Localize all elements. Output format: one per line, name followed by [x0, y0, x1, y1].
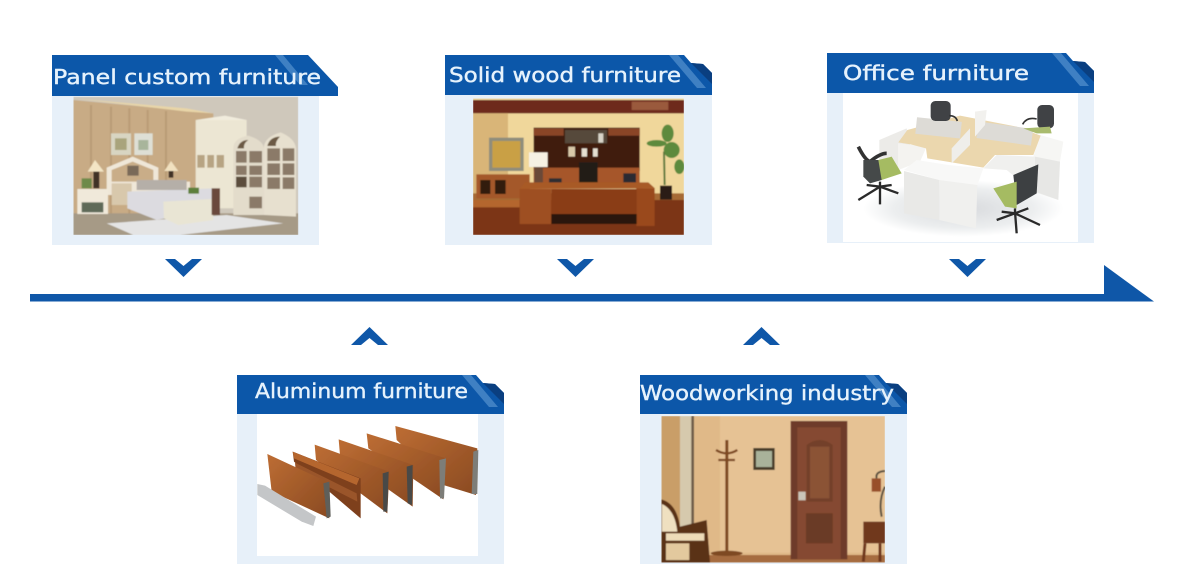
panel: Panel custom furniture [52, 55, 338, 245]
banner corner fold [886, 383, 907, 404]
panel: Office furniture [827, 53, 1094, 243]
photo: office workstation [858, 101, 1063, 237]
heading: Aluminum furniture [255, 379, 468, 403]
banner shine [865, 375, 901, 407]
card background [237, 414, 504, 564]
timeline arrow [30, 265, 1154, 302]
heading: Office furniture [843, 61, 1029, 85]
white image area [257, 414, 478, 556]
chevron: panel custom down [165, 259, 202, 277]
card background [445, 95, 712, 245]
photo: bedroom [73, 97, 298, 235]
banner [827, 53, 1094, 93]
heading: Panel custom furniture [53, 65, 321, 89]
banner corner fold [483, 383, 504, 404]
chevron: aluminum up [351, 327, 388, 345]
photo: executive office [473, 98, 684, 235]
photo: aluminum wood-grain profiles [257, 426, 478, 526]
banner shine [1052, 53, 1089, 86]
photo: door and hallway [661, 416, 885, 563]
chevron: office down [949, 259, 986, 277]
banner [52, 55, 338, 96]
banner shine [462, 375, 498, 407]
card background [827, 93, 1094, 243]
white image area [843, 93, 1078, 242]
card background [52, 96, 319, 245]
banner [640, 375, 907, 414]
banner corner fold [1073, 61, 1094, 82]
panel: Solid wood furniture [445, 55, 712, 245]
heading: Woodworking industry [640, 381, 894, 405]
chevron: solid wood down [557, 259, 594, 277]
panel: Aluminum furniture [237, 375, 504, 564]
heading: Solid wood furniture [449, 63, 681, 87]
card background [640, 414, 907, 564]
chevron: woodworking up [743, 327, 780, 345]
banner corner fold [691, 63, 712, 84]
banner shine [275, 55, 308, 85]
panel: Woodworking industry [640, 375, 907, 564]
banner [237, 375, 504, 414]
banner shine [669, 55, 706, 88]
banner [445, 55, 712, 95]
